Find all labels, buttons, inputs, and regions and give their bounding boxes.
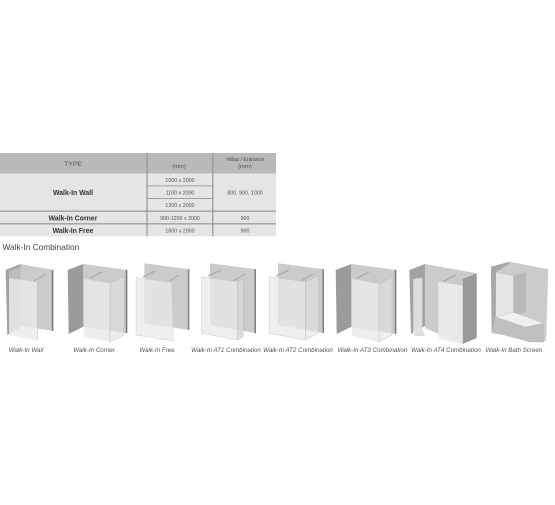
icon: Walk-In AT3 Combination (336, 264, 396, 342)
row: Walk-In Corner: 900-1200 x 2000 (160, 216, 200, 222)
icon: Walk-In AT2 Combination (269, 263, 324, 340)
caption: Walk-In AT1 Combination: Walk-In AT1 Combination (191, 347, 261, 354)
caption: Walk-In Corner: Walk-In Corner (73, 347, 116, 354)
caption: Walk-In Bath Screen: Walk-In Bath Screen (486, 347, 543, 354)
row: Walk-In Wall (53, 178, 263, 209)
table header row: TYPE (64, 161, 82, 168)
icon: Walk-In Bath Screen (491, 262, 548, 342)
row: Walk-In Wall: 1200 x 2000 (165, 203, 195, 209)
row: Walk-In Free: 1600 x 2000 (165, 229, 195, 235)
table header row: Vidup / Entrance (226, 157, 264, 163)
table grid lines (0, 153, 276, 236)
icon: Walk-In AT1 Combination (202, 263, 256, 340)
row: Walk-In Free: 900 (241, 229, 249, 235)
row: Walk-In Corner (49, 215, 249, 222)
icon: Walk-In Free (136, 263, 189, 341)
caption: Walk-In AT4 Combination: Walk-In AT4 Combination (411, 347, 481, 354)
table header row: (mm) (238, 164, 252, 170)
table header row: (mm) (172, 164, 186, 170)
row: Walk-In Wall: 1100 x 2000 (166, 190, 194, 196)
caption: Walk-In Free: Walk-In Free (139, 347, 175, 354)
icon: Walk-In AT4 Combination (409, 264, 477, 344)
caption: Walk-In AT2 Combination: Walk-In AT2 Combination (263, 347, 333, 354)
icon: Walk-In Corner (68, 264, 127, 342)
row: Walk-In Wall: Walk-In Wall (53, 190, 93, 197)
caption: Walk-In AT3 Combination: Walk-In AT3 Combination (338, 347, 408, 354)
row: Walk-In Free: Walk-In Free (53, 228, 94, 235)
row: Walk-In Free (53, 228, 249, 235)
table header row (0, 153, 276, 174)
table body background (0, 174, 276, 236)
row: Walk-In Wall: 1000 x 2000 (165, 178, 195, 184)
row: Walk-In Wall: 800, 900, 1000 (227, 190, 263, 196)
captions (9, 347, 543, 354)
section heading: Walk-In Combination (2, 242, 80, 252)
row: Walk-In Corner: 900 (241, 216, 249, 222)
specification table (0, 153, 276, 236)
row: Walk-In Corner: Walk-In Corner (49, 215, 98, 222)
caption: Walk-In Wall: Walk-In Wall (9, 347, 44, 354)
icon: Walk-In Wall (6, 264, 53, 341)
